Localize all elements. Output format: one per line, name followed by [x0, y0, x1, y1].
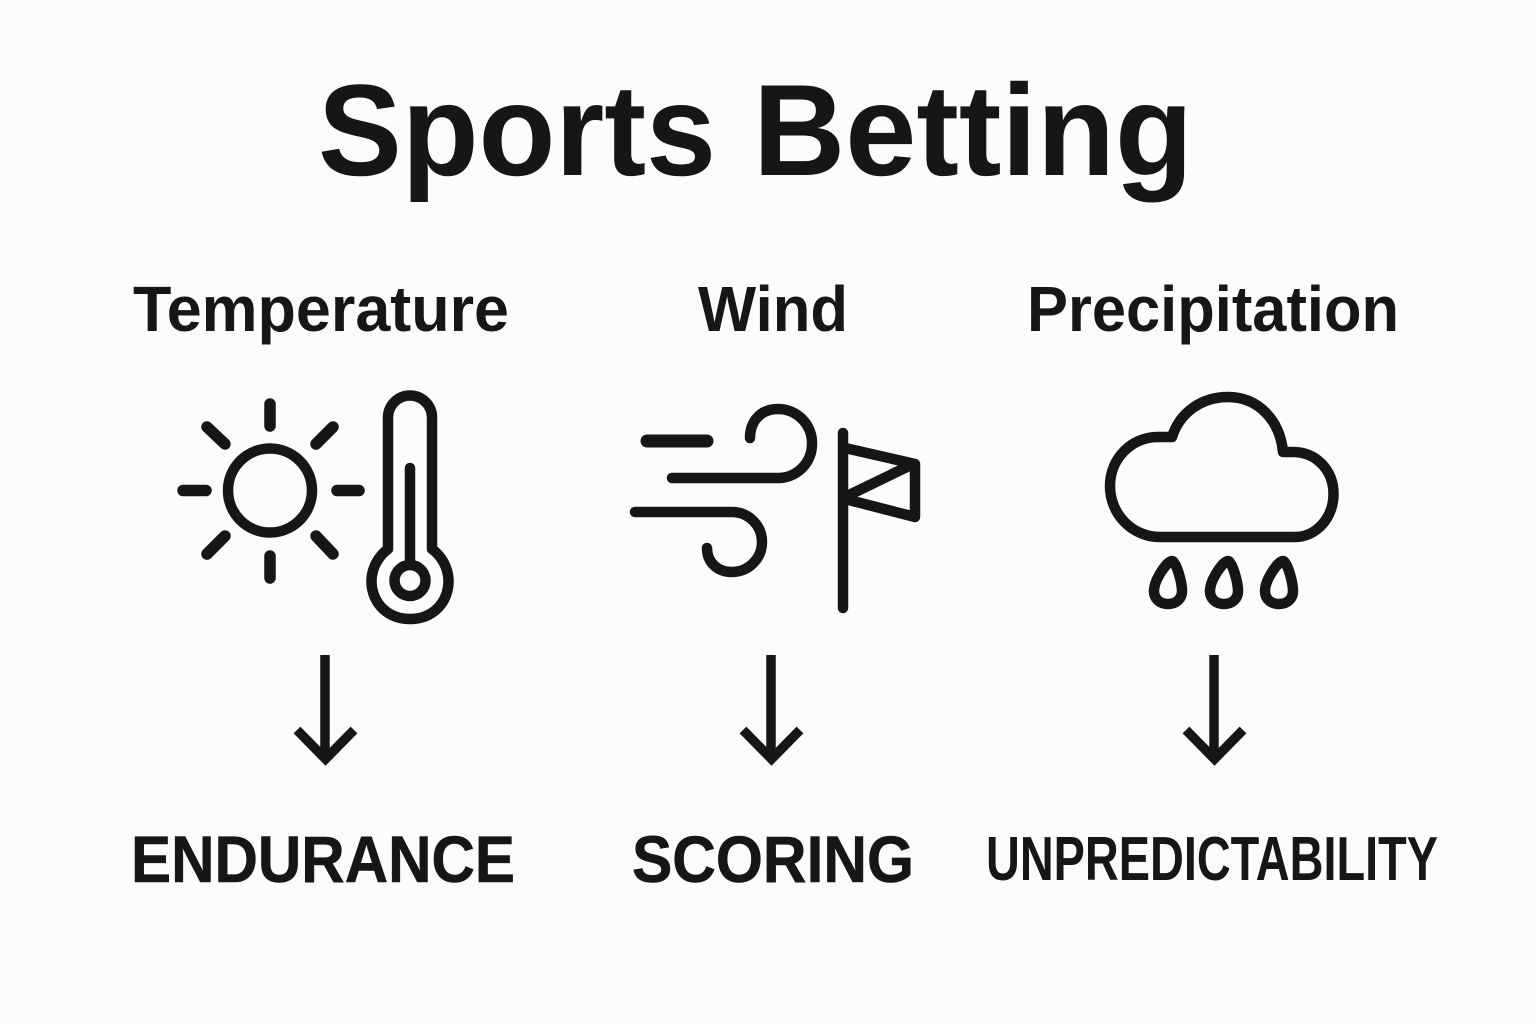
icon: sun	[183, 404, 359, 578]
arrow: wind to scoring	[743, 655, 800, 759]
icon: rain cloud	[1110, 397, 1334, 604]
title: Sports	[318, 57, 716, 203]
heading: precipitation: Precipitation	[1027, 273, 1399, 345]
icon: thermometer	[371, 396, 449, 619]
arrow: temperature to endurance	[297, 655, 354, 759]
icon: wind lines	[635, 409, 812, 572]
heading: wind: Wind	[698, 273, 848, 345]
arrow: precipitation to unpredictability	[1186, 655, 1243, 759]
heading: temperature: Temperature	[133, 273, 509, 345]
label: endurance: ENDURANCE	[131, 822, 515, 896]
label: scoring: SCORING	[632, 822, 914, 896]
title: Betting	[753, 57, 1193, 203]
icon: flag	[843, 433, 915, 608]
title	[318, 57, 1193, 203]
